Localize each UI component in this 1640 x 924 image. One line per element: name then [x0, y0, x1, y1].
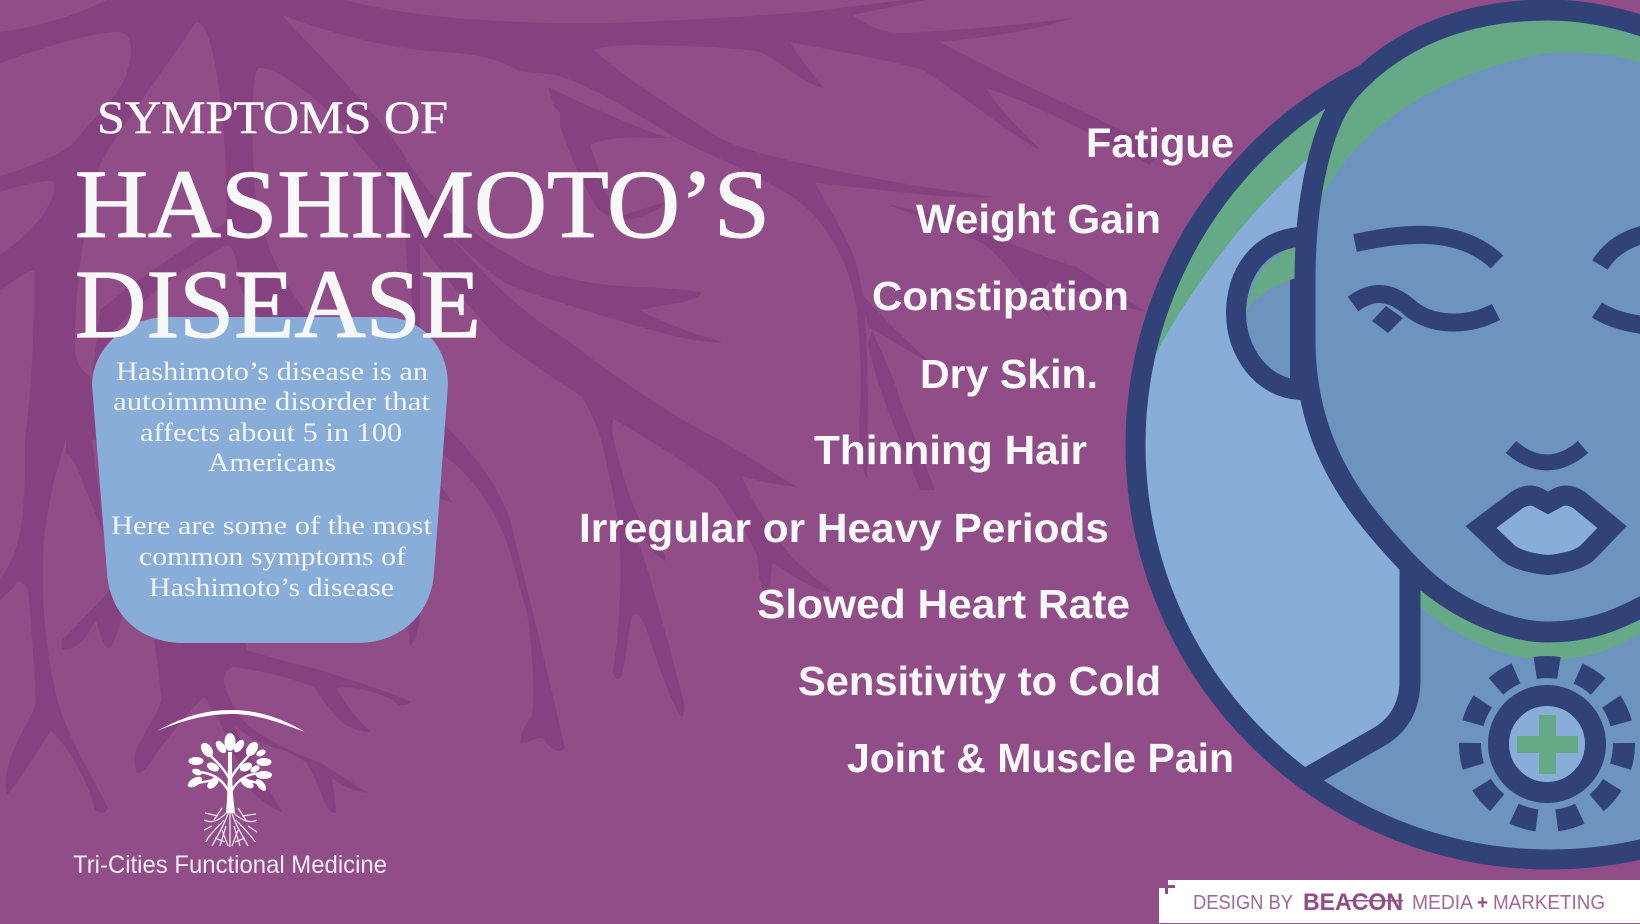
description text: Hashimoto’s disease — [149, 573, 394, 602]
portrait illustration — [1120, 0, 1640, 880]
left closed eye — [1353, 294, 1496, 323]
heading: hashimoto's disease — [75, 151, 770, 358]
portrait circle fill — [1135, 30, 1640, 860]
credit background — [1159, 880, 1640, 923]
design credit bar — [1159, 880, 1640, 923]
credit text: + — [1477, 892, 1488, 914]
description blob background — [92, 317, 448, 643]
background tree branches — [0, 0, 1160, 813]
logo arc — [157, 710, 305, 732]
description text: affects about 5 in 100 — [140, 418, 402, 447]
corner mark — [1165, 885, 1175, 894]
description text: common symptoms of — [139, 542, 406, 571]
symptom list: Sensitivity to Cold — [798, 658, 1161, 704]
symptom list: Constipation — [872, 273, 1129, 319]
credit text: BEACON — [1303, 889, 1403, 916]
left eyebrow — [1355, 235, 1497, 262]
credit text: MARKETING — [1493, 892, 1605, 914]
nose — [1511, 447, 1583, 462]
lips — [1481, 496, 1612, 565]
description text — [111, 357, 433, 602]
description text: Hashimoto’s disease is an — [116, 357, 428, 386]
heading: hashimoto's disease: HASHIMOTO’S — [75, 151, 770, 258]
symptom list: Joint & Muscle Pain — [847, 735, 1234, 781]
credit text — [1193, 889, 1605, 916]
thyroid gear icon — [1470, 667, 1624, 821]
right closed eye — [1597, 310, 1640, 326]
symptom list: Irregular or Heavy Periods — [579, 505, 1109, 551]
credit text: DESIGN BY — [1193, 892, 1293, 914]
ear — [1236, 237, 1300, 390]
face features — [1353, 233, 1640, 565]
heading: hashimoto's disease: DISEASE — [75, 251, 481, 358]
description text: autoimmune disorder that — [113, 387, 431, 416]
heading: symptoms of: SYMPTOMS OF — [97, 92, 448, 144]
left eye lash — [1372, 306, 1403, 333]
description text: Americans — [208, 448, 336, 477]
green plus — [1517, 715, 1578, 774]
logo roots — [204, 808, 257, 847]
green crescent — [1156, 108, 1326, 352]
symptom list — [579, 120, 1234, 781]
neck — [1305, 570, 1640, 850]
symptom list: Slowed Heart Rate — [757, 581, 1130, 627]
logo tree — [186, 733, 272, 813]
background leaf gaps — [0, 0, 600, 440]
symptom list: Dry Skin. — [920, 351, 1098, 397]
right eyebrow — [1600, 233, 1640, 265]
symptom list: Thinning Hair — [814, 427, 1087, 473]
logo wordmark: Tri-Cities Functional Medicine — [73, 851, 387, 879]
circle outline — [1136, 30, 1640, 860]
description text: Here are some of the most — [111, 511, 433, 540]
head — [1290, 0, 1640, 632]
credit text: MEDIA — [1412, 892, 1474, 914]
symptom list: Weight Gain — [916, 196, 1161, 242]
clinic logo — [73, 710, 387, 879]
symptom list: Fatigue — [1086, 120, 1234, 166]
